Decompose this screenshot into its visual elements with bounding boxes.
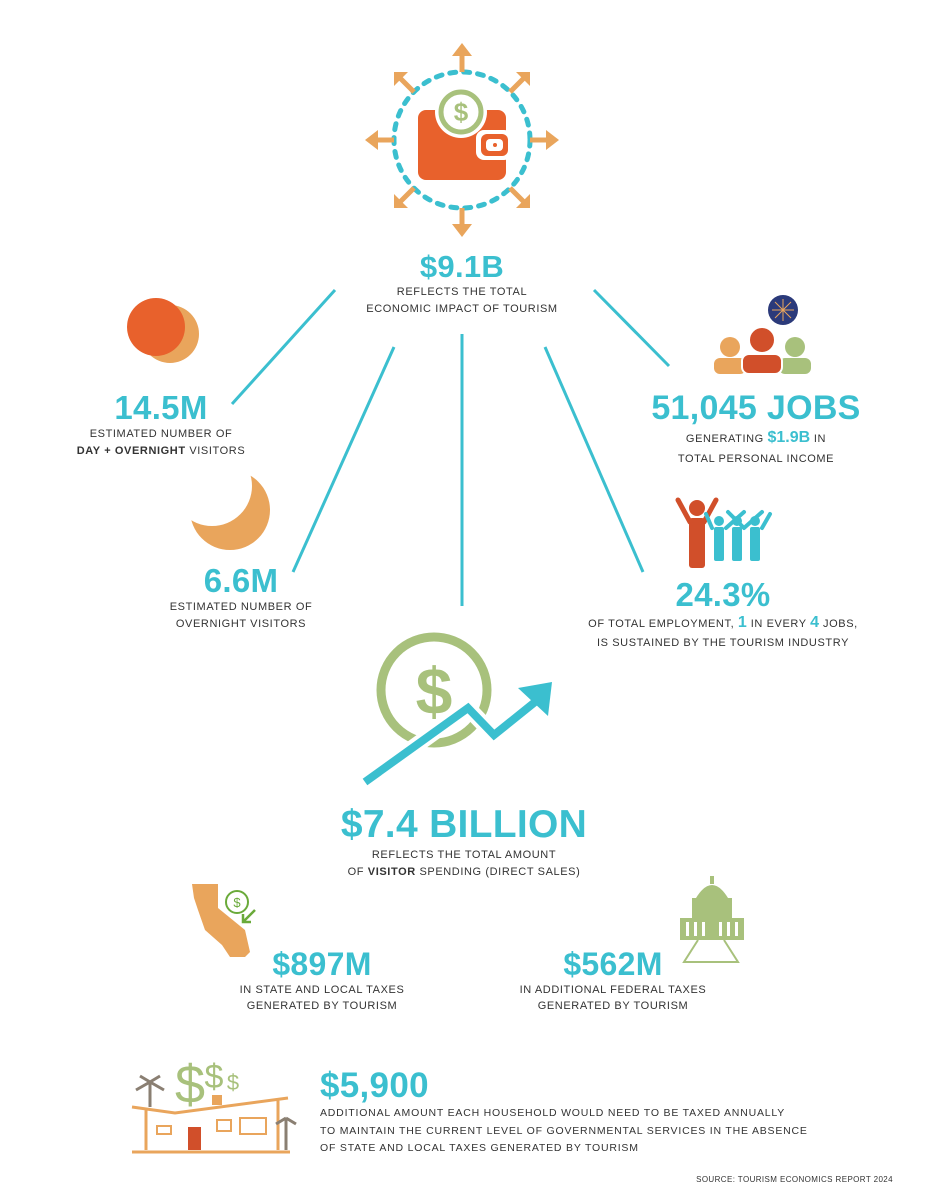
icon: house with dollars bbox=[132, 1055, 296, 1152]
stat: 24.3% bbox=[588, 576, 858, 649]
stat: 562M: GENERATED BY TOURISM bbox=[538, 1000, 688, 1012]
stat: 562M: $562M bbox=[563, 946, 663, 982]
stat: 14.5M: ESTIMATED NUMBER OF bbox=[90, 428, 232, 440]
stat: 897M bbox=[240, 946, 404, 1012]
icon: california bbox=[192, 884, 255, 957]
stat: 7.4 billion: REFLECTS THE TOTAL AMOUNT bbox=[372, 849, 556, 861]
stat: 5,900: TO MAINTAIN THE CURRENT LEVEL OF GOVERNMENTAL SERVICES IN THE ABSENCE bbox=[320, 1124, 808, 1136]
stat: 9.1B: $9.1B bbox=[420, 249, 504, 284]
stat: 6.6M: OVERNIGHT VISITORS bbox=[176, 618, 306, 630]
stat: 6.6M bbox=[170, 562, 312, 630]
stat: 897M: $897M bbox=[272, 946, 372, 982]
stat: 7.4 billion bbox=[341, 803, 587, 878]
icon: house with dollars: $ bbox=[205, 1058, 224, 1096]
icon: dollar growth arrow: $ bbox=[416, 654, 452, 728]
stat: jobs: GENERATING $1.9B IN bbox=[686, 429, 826, 446]
stat: jobs: TOTAL PERSONAL INCOME bbox=[678, 453, 834, 465]
icon: three people with firework bbox=[714, 295, 811, 374]
stat: 24.3%: IS SUSTAINED BY THE TOURISM INDUSTRY bbox=[597, 637, 849, 649]
source: SOURCE: TOURISM ECONOMICS REPORT 2024 bbox=[696, 1175, 893, 1184]
stat: 562M bbox=[520, 946, 706, 1012]
stat: 9.1B bbox=[366, 249, 558, 315]
stat: 6.6M: ESTIMATED NUMBER OF bbox=[170, 601, 312, 613]
icon: wallet with arrows: $ bbox=[454, 97, 469, 127]
stat: 562M: IN ADDITIONAL FEDERAL TAXES bbox=[520, 984, 706, 996]
stat: 14.5M: DAY + OVERNIGHT VISITORS bbox=[77, 445, 245, 457]
stat: 897M: GENERATED BY TOURISM bbox=[247, 1000, 397, 1012]
icon: california: $ bbox=[233, 895, 241, 910]
stat: jobs: 51,045 JOBS bbox=[651, 389, 861, 427]
connector lines bbox=[232, 290, 669, 606]
stat: 7.4 billion: OF VISITOR SPENDING (DIRECT SALES) bbox=[348, 866, 580, 878]
icon: capitol bbox=[680, 876, 744, 962]
icon: wallet with arrows bbox=[365, 43, 559, 237]
stat: 5,900: OF STATE AND LOCAL TAXES GENERATED BY TOURISM bbox=[320, 1142, 639, 1154]
stat: 5,900 bbox=[320, 1066, 808, 1154]
icon: house with dollars: $ bbox=[175, 1055, 205, 1115]
stat: 24.3%: OF TOTAL EMPLOYMENT, 1 IN EVERY 4 JOBS, bbox=[588, 614, 858, 631]
stat: 14.5M bbox=[77, 389, 245, 457]
icon: sun/moon orange bbox=[127, 298, 199, 363]
icon: house with dollars: $ bbox=[227, 1070, 239, 1095]
stat: 5,900: $5,900 bbox=[320, 1066, 429, 1105]
icon: people celebrating bbox=[678, 500, 770, 568]
stat: 7.4 billion: $7.4 BILLION bbox=[341, 803, 587, 846]
stat: 897M: IN STATE AND LOCAL TAXES bbox=[240, 984, 404, 996]
icon: crescent moon bbox=[172, 446, 270, 550]
stat: 5,900: ADDITIONAL AMOUNT EACH HOUSEHOLD WOULD NEED TO BE TAXED ANNUALLY bbox=[320, 1107, 785, 1119]
stat: jobs bbox=[651, 389, 861, 465]
stat: 6.6M: 6.6M bbox=[204, 562, 278, 599]
icon: dollar growth arrow bbox=[365, 637, 552, 782]
stat: 9.1B: ECONOMIC IMPACT OF TOURISM bbox=[366, 303, 558, 315]
stat: 14.5M: 14.5M bbox=[114, 389, 208, 426]
stat: 24.3%: 24.3% bbox=[675, 576, 771, 613]
stat: 9.1B: REFLECTS THE TOTAL bbox=[397, 286, 527, 298]
